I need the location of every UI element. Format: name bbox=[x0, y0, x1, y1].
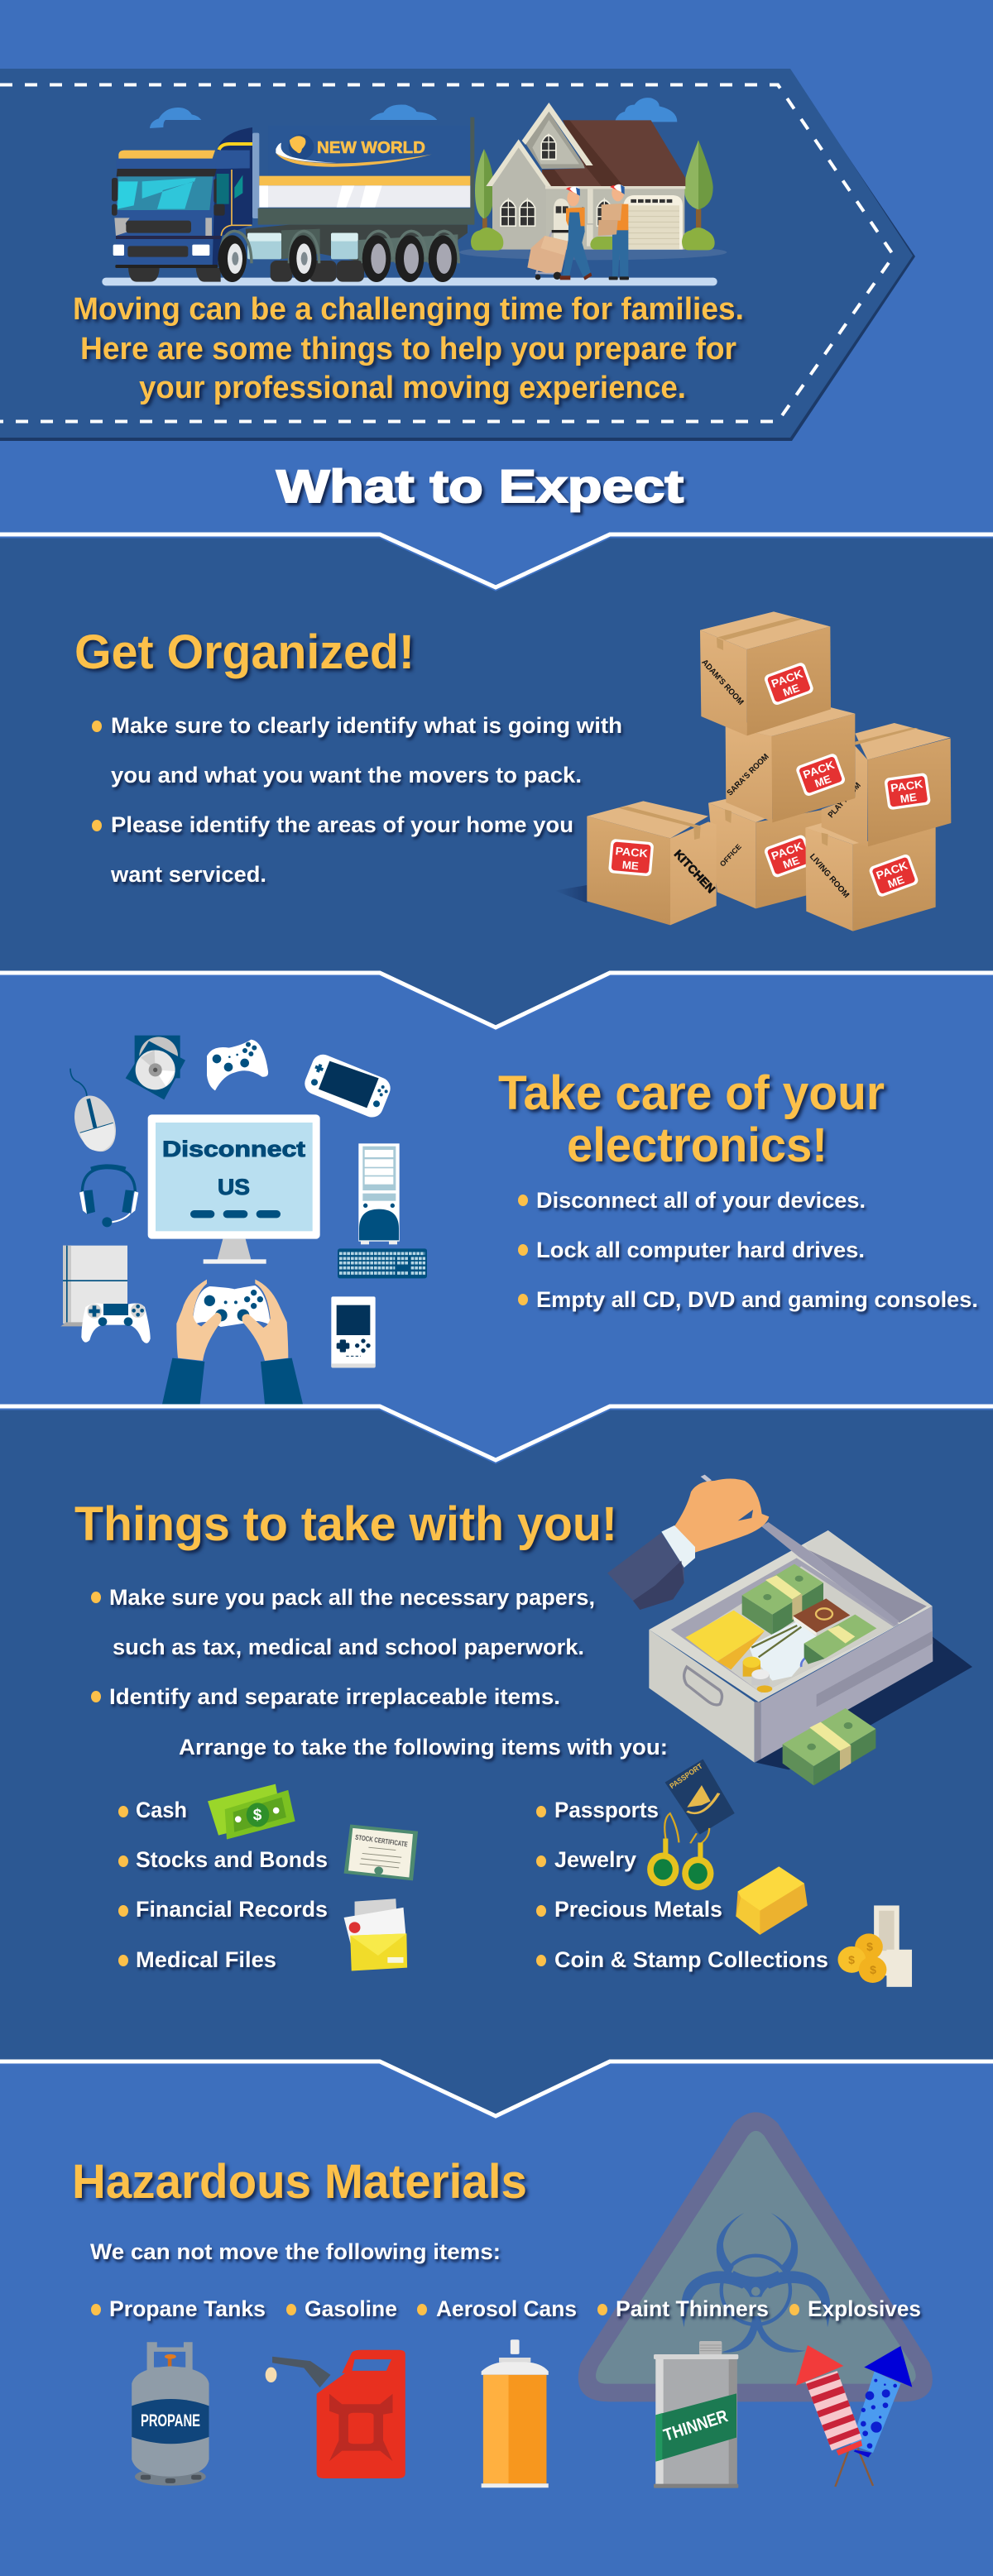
list: left column: Cash bbox=[136, 1798, 187, 1822]
icon: earrings bbox=[647, 1813, 713, 1890]
list: forbidden items: Gasoline bbox=[305, 2296, 397, 2321]
illustration: stacked cardboard boxes: OFFICE bbox=[718, 842, 743, 869]
icon: stock certificate: STOCK CERTIFICATE bbox=[355, 1833, 409, 1848]
intro text bbox=[73, 292, 744, 405]
handheld console bbox=[301, 1051, 394, 1121]
icon: stock certificate bbox=[344, 1825, 418, 1880]
mover one bbox=[536, 232, 569, 274]
illustration: stacked cardboard boxes: PACK bbox=[770, 840, 805, 863]
panel: hazardous materials bbox=[0, 2061, 993, 2576]
icon: passport: PASSPORT bbox=[668, 1761, 704, 1790]
bullet list: papers: such as tax, medical and school paperwork. bbox=[113, 1635, 584, 1659]
right tree bbox=[696, 209, 701, 227]
heading: electronics bbox=[498, 1066, 885, 1172]
intro text: your professional moving experience. bbox=[139, 371, 686, 405]
console box bbox=[63, 1246, 127, 1324]
intro text: Moving can be a challenging time for families. bbox=[73, 292, 744, 327]
adam box bbox=[700, 611, 830, 649]
road bbox=[102, 278, 717, 285]
sara box bbox=[726, 707, 855, 736]
panel: things to take with you bbox=[0, 1406, 993, 2061]
heading: get organized: Get Organized! bbox=[74, 625, 415, 679]
icon: hazard triangle bbox=[578, 2112, 933, 2401]
illustration: stacked cardboard boxes: ME bbox=[781, 854, 801, 871]
icon: coins and stamps: $ bbox=[866, 1940, 873, 1953]
bullet list: papers: Make sure you pack all the necessary papers, bbox=[109, 1585, 595, 1610]
icon: coins and stamps: $ bbox=[848, 1953, 855, 1966]
bullet list: papers: Identify and separate irreplaceable items. bbox=[109, 1684, 560, 1709]
icon: propane tank bbox=[132, 2342, 209, 2486]
controller one bbox=[207, 1040, 268, 1090]
bullet list: get organized: Make sure to clearly identify what is going with bbox=[111, 713, 622, 738]
illustration: stacked cardboard boxes: ME bbox=[899, 791, 918, 806]
illustration: stacked cardboard boxes: ADAM'S ROOM bbox=[699, 658, 745, 707]
bullet list: electronics: Disconnect all of your devices. bbox=[536, 1188, 866, 1213]
tower pc bbox=[358, 1143, 400, 1242]
roof bbox=[542, 120, 685, 187]
icon: cash: $ bbox=[253, 1807, 262, 1824]
kitchen box bbox=[587, 801, 708, 838]
garage bbox=[623, 195, 683, 250]
illustration: stacked cardboard boxes: ME bbox=[813, 773, 833, 790]
icon: gold bar bbox=[736, 1866, 808, 1935]
illustration: stacked cardboard boxes: LIVING ROOM bbox=[808, 852, 851, 900]
panel: electronics bbox=[0, 973, 993, 1406]
icon: paint thinner can: THINNER bbox=[661, 2406, 730, 2445]
monitor bbox=[218, 1239, 251, 1260]
illustration: stacked cardboard boxes: PACK bbox=[615, 845, 649, 859]
trailer bbox=[268, 126, 470, 176]
icon: propane tank: PROPANE bbox=[141, 2411, 200, 2430]
illustration: stacked cardboard boxes: PLAY ROOM bbox=[827, 781, 863, 820]
heading: things to take: Things to take with you! bbox=[74, 1497, 617, 1551]
walls bbox=[545, 187, 684, 250]
left tree bbox=[482, 218, 487, 230]
second money stack bbox=[801, 1656, 808, 1667]
list: forbidden items: Propane Tanks bbox=[109, 2296, 266, 2321]
icon: gas can bbox=[266, 2350, 405, 2478]
bullet list: papers bbox=[91, 1585, 595, 1709]
illustration: drawer of valuables bbox=[607, 1475, 972, 1785]
illustration: moving truck bbox=[102, 104, 717, 285]
portable player bbox=[331, 1296, 376, 1367]
panel: get organized bbox=[0, 534, 993, 973]
monitor screen text: US bbox=[218, 1175, 250, 1199]
subheading: items to take: Arrange to take the following items with you: bbox=[179, 1735, 668, 1760]
heading: What to Expect: What to Expect bbox=[276, 460, 684, 512]
list: right column: Passports bbox=[554, 1798, 659, 1822]
heading: hazardous materials: Hazardous Materials bbox=[72, 2155, 527, 2209]
gold bbox=[717, 1631, 765, 1669]
illustration: stacked cardboard boxes: PACK bbox=[890, 778, 924, 794]
windows bbox=[500, 134, 612, 227]
illustration: stacked cardboard boxes: PACK bbox=[875, 859, 909, 882]
list: left column: Financial Records bbox=[136, 1897, 328, 1922]
rod bbox=[761, 1522, 899, 1626]
hand bbox=[701, 1475, 712, 1482]
play room box bbox=[855, 723, 951, 759]
list: left column: Medical Files bbox=[136, 1947, 276, 1972]
logo globe and swoosh bbox=[289, 134, 314, 160]
keyboard bbox=[338, 1248, 427, 1278]
mouse bbox=[70, 1069, 87, 1098]
icon: paint thinner can bbox=[654, 2341, 738, 2488]
bullet list: electronics: Empty all CD, DVD and gaming consoles. bbox=[536, 1287, 978, 1312]
monitor screen text: Disconnect bbox=[162, 1137, 305, 1161]
office box bbox=[708, 799, 772, 822]
list: left column: Stocks and Bonds bbox=[136, 1847, 328, 1872]
list: left column bbox=[118, 1798, 328, 1972]
heading: electronics: Take care of your bbox=[498, 1066, 885, 1120]
living box bbox=[805, 823, 868, 845]
icon: aerosol can bbox=[482, 2339, 549, 2487]
heading: electronics: electronics! bbox=[567, 1118, 828, 1172]
bullet list: electronics bbox=[518, 1188, 978, 1312]
icon: fireworks bbox=[796, 2345, 912, 2487]
book bbox=[793, 1616, 817, 1635]
bullet list: electronics: Lock all computer hard drives. bbox=[536, 1238, 865, 1262]
illustration: stacked cardboard boxes: SARA'S ROOM bbox=[726, 752, 771, 797]
illustration: stacked cardboard boxes: ME bbox=[621, 859, 640, 872]
illustration: stacked cardboard boxes: PACK bbox=[770, 668, 805, 690]
fuel tanks bbox=[247, 233, 281, 259]
illustration: stacked cardboard boxes bbox=[554, 611, 951, 931]
bullet list: get organized: you and what you want the movers to pack. bbox=[111, 763, 582, 788]
list: forbidden items: Paint Thinners bbox=[616, 2296, 769, 2321]
illustration: stacked cardboard boxes: ME bbox=[781, 682, 801, 699]
list: right column: Precious Metals bbox=[554, 1897, 722, 1922]
icon: records envelope bbox=[344, 1898, 407, 1970]
panel: intro banner bbox=[0, 69, 915, 441]
list: right column: Jewelry bbox=[554, 1847, 636, 1872]
cab bbox=[205, 128, 252, 266]
icon: cash bbox=[208, 1784, 295, 1839]
disc case bbox=[135, 1036, 180, 1078]
illustration: electronic devices bbox=[60, 1036, 427, 1404]
intro text: Here are some things to help you prepare for bbox=[80, 332, 736, 366]
bullet list: get organized: want serviced. bbox=[110, 862, 266, 887]
papers bbox=[749, 1621, 822, 1681]
icon: coins and stamps bbox=[837, 1905, 912, 1987]
wheels bbox=[128, 268, 160, 282]
list: forbidden items: Aerosol Cans bbox=[436, 2296, 577, 2321]
hands with controller bbox=[193, 1286, 271, 1327]
illustration: house and movers bbox=[459, 98, 727, 280]
bullet list: get organized bbox=[92, 713, 622, 887]
icon: passport bbox=[665, 1760, 735, 1835]
door and pillar bbox=[554, 199, 569, 242]
bullet list: get organized: Please identify the areas of your home you bbox=[111, 812, 573, 837]
bushes bbox=[471, 227, 715, 251]
list: forbidden items: Explosives bbox=[808, 2296, 921, 2321]
intro line: We can not move the following items: bbox=[90, 2239, 501, 2264]
list: right column bbox=[536, 1798, 828, 1972]
coins bbox=[743, 1661, 760, 1677]
icon: coins and stamps: $ bbox=[870, 1963, 876, 1976]
list: right column: Coin & Stamp Collections bbox=[554, 1947, 828, 1972]
monitor screen text bbox=[162, 1137, 305, 1199]
illustration: stacked cardboard boxes: ME bbox=[886, 874, 906, 890]
interior money stack bbox=[742, 1595, 772, 1635]
truck logo text: NEW WORLD bbox=[317, 139, 425, 157]
handle bbox=[684, 1667, 722, 1705]
illustration: stacked cardboard boxes: KITCHEN bbox=[672, 847, 718, 895]
floor money stack bbox=[783, 1744, 813, 1785]
mover two bbox=[612, 229, 628, 277]
illustration: stacked cardboard boxes: PACK bbox=[801, 759, 837, 781]
list: forbidden items bbox=[91, 2296, 921, 2321]
controller two bbox=[81, 1304, 151, 1343]
headset bbox=[82, 1168, 135, 1193]
